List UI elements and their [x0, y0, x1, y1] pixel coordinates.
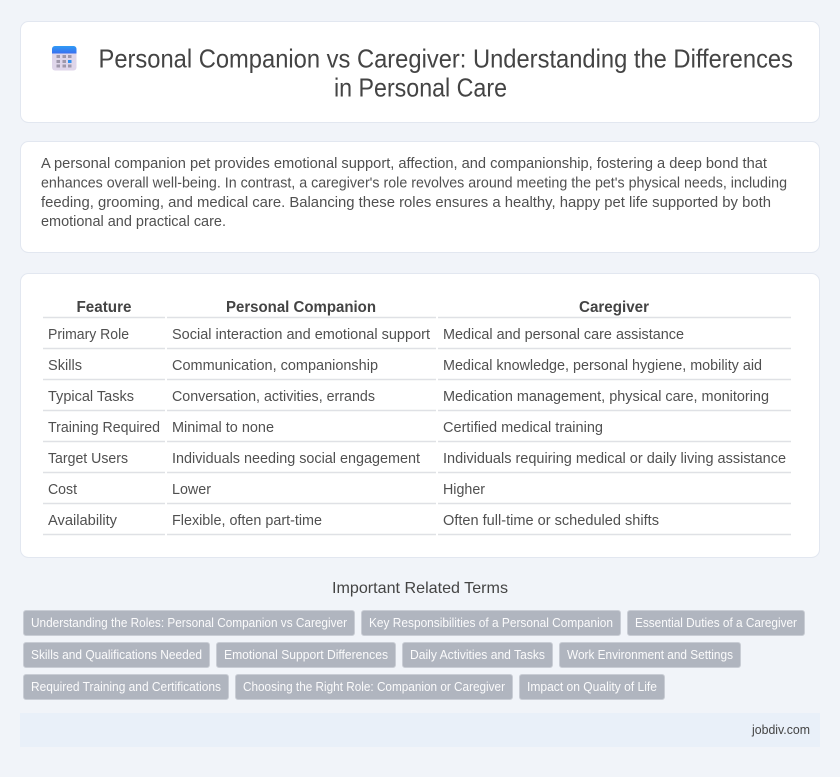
table header: Personal Companion [226, 299, 376, 316]
related term tags: Choosing the Right Role: Companion or Caregiver [243, 680, 505, 694]
row: skills: Communication, companionship [172, 358, 378, 374]
row: target users [48, 451, 786, 467]
related term tags: Understanding the Roles: Personal Companion vs Caregiver [31, 616, 347, 630]
footer: jobdiv.com [751, 723, 810, 737]
text block: intro: A personal companion pet provides emotional support, affection, and companionship, fostering a deep bond that [41, 156, 767, 172]
row: skills: Skills [48, 358, 82, 374]
row: skills: Medical knowledge, personal hygiene, mobility aid [443, 358, 762, 374]
row: primary role: Primary Role [48, 327, 129, 343]
row: cost [48, 482, 485, 498]
related term tags: Required Training and Certifications [31, 680, 221, 694]
panel: intro paragraph [20, 142, 820, 252]
icon: calendar [52, 46, 76, 70]
footer [20, 713, 820, 747]
row: skills [48, 358, 762, 374]
title: in Personal Care [334, 74, 507, 102]
row: cost: Lower [172, 482, 211, 498]
related term tags: Work Environment and Settings [567, 648, 733, 662]
row: target users: Individuals needing social engagement [172, 451, 420, 467]
row: training required: Certified medical training [443, 420, 603, 436]
row: typical tasks [48, 389, 769, 405]
related term tags: Skills and Qualifications Needed [31, 648, 202, 662]
row: training required: Training Required [48, 420, 160, 436]
row: primary role: Medical and personal care assistance [443, 327, 684, 343]
text block: intro: emotional and practical care. [41, 214, 226, 230]
title [98, 46, 793, 102]
row: primary role: Social interaction and emotional support [172, 327, 430, 343]
related term tags: Daily Activities and Tasks [410, 648, 545, 662]
table header: Feature [76, 299, 132, 316]
heading: related terms: Important Related Terms [332, 580, 508, 597]
row: availability: Often full-time or scheduled shifts [443, 513, 659, 529]
row: training required: Minimal to none [172, 420, 274, 436]
row: availability [48, 513, 659, 529]
row: typical tasks: Typical Tasks [48, 389, 134, 405]
row: training required [48, 420, 603, 436]
panel: title header [20, 22, 820, 122]
text block: intro: enhances overall well-being. In contrast, a caregiver's role revolves around meeting the pet's physical needs, including [41, 176, 787, 192]
row: typical tasks: Medication management, physical care, monitoring [443, 389, 769, 405]
title: Personal Companion vs Caregiver: Understanding the Differences [98, 46, 793, 74]
table header: Caregiver [579, 299, 649, 316]
row: typical tasks: Conversation, activities, errands [172, 389, 375, 405]
panel: comparison table [20, 274, 820, 558]
row: cost: Cost [48, 482, 77, 498]
row: target users: Target Users [48, 451, 128, 467]
row: target users: Individuals requiring medical or daily living assistance [443, 451, 786, 467]
row: cost: Higher [443, 482, 485, 498]
row: primary role [48, 327, 684, 343]
text block: intro [41, 156, 787, 230]
related term tags: Key Responsibilities of a Personal Companion [369, 616, 613, 630]
text block: intro: feeding, grooming, and medical care. Balancing these roles ensures a healthy, happy pet life supported by both [41, 195, 771, 211]
related term tags: Impact on Quality of Life [527, 680, 657, 694]
related term tags [24, 610, 804, 700]
row: availability: Availability [48, 513, 118, 529]
related term tags: Emotional Support Differences [224, 648, 388, 662]
row: availability: Flexible, often part-time [172, 513, 322, 529]
related term tags: Essential Duties of a Caregiver [635, 616, 797, 630]
table header [76, 299, 649, 316]
